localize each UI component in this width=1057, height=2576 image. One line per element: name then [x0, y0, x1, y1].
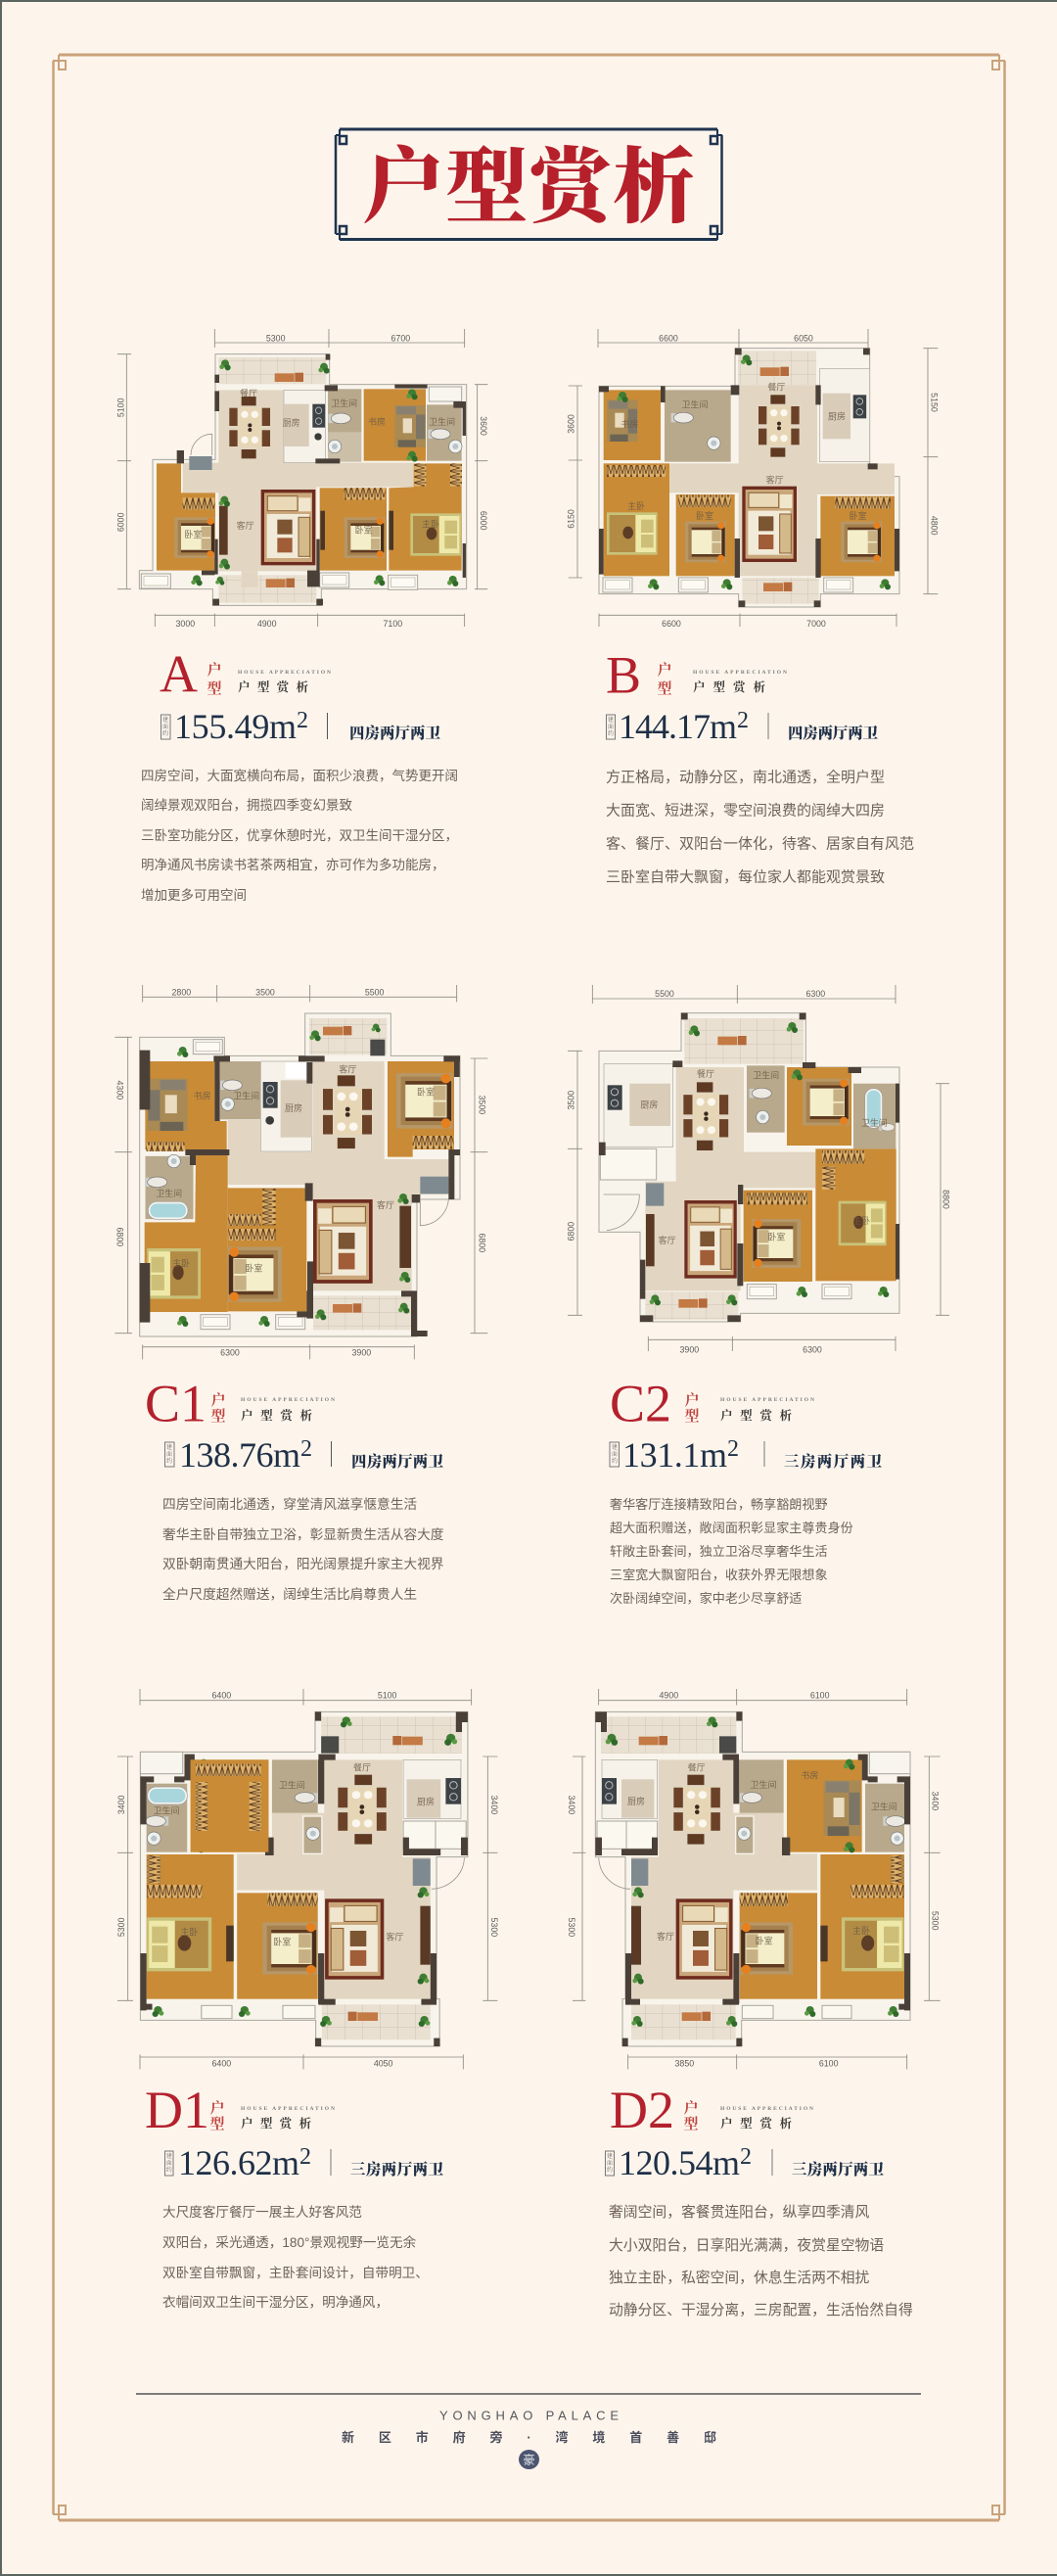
footer: [136, 2394, 921, 2469]
room labels D2: 客厅: [657, 1931, 674, 1942]
sub heading: 户型赏析: [720, 1406, 792, 1424]
dimensions A: 7100: [384, 619, 402, 629]
title box: [336, 129, 722, 240]
dimensions D1: 3400: [489, 1796, 499, 1814]
area badge: [605, 2151, 615, 2176]
area: 2: [300, 1436, 312, 1462]
dimensions C2: 6300: [806, 989, 825, 999]
room count: 四房两厅两卫: [351, 1450, 443, 1472]
room labels D1: [154, 1761, 435, 1947]
room labels D1: 主卧: [180, 1927, 198, 1938]
description D2: 大小双阳台，日享阳光满满，夜赏星空物语: [609, 2237, 884, 2254]
dimensions D1: 5100: [378, 1691, 397, 1701]
description C1: 奢华主卧自带独立卫浴，彰显新贵生活从容大度: [162, 1526, 444, 1542]
vertical label: 户: [210, 1389, 226, 1410]
divider: [330, 2149, 332, 2176]
room labels C1: 卫生间: [156, 1188, 182, 1198]
vertical label: [683, 2097, 699, 2133]
dimensions B: 4800: [930, 516, 940, 536]
room labels C1: [156, 1063, 435, 1273]
type letter: D2: [610, 2081, 674, 2139]
dimensions C1: 5500: [365, 987, 385, 997]
kitchen D2: [597, 1759, 658, 1849]
room labels D1: 卧室: [273, 1937, 291, 1947]
room labels B: 客厅: [766, 474, 784, 485]
room labels D2: [627, 1761, 897, 1946]
outer walls C2: [599, 1013, 899, 1322]
description C2: 超大面积赠送，敞阔面积彰显家主尊贵身份: [610, 1520, 853, 1535]
master bathroom tub D1: [148, 1787, 187, 1804]
header C1: [145, 1375, 443, 1475]
room labels C2: 卧室: [767, 1232, 785, 1242]
living and dining A: [183, 390, 414, 587]
room labels B: 主卧: [627, 500, 645, 511]
bedrooms A: [157, 463, 462, 571]
dimensions A: 6000: [115, 512, 125, 532]
vertical label: 型: [683, 2113, 699, 2133]
description D1: [162, 2204, 429, 2310]
description C2: 奢华客厅连接精致阳台，畅享豁朗视野: [610, 1496, 828, 1512]
room labels A: 卫生间: [331, 398, 357, 408]
bedrooms B: [604, 463, 895, 576]
vertical label: [209, 2097, 225, 2133]
floor plan C2: [567, 985, 950, 1354]
sub heading: [238, 670, 331, 695]
area: 144.17m: [619, 707, 737, 746]
vertical label: 户: [684, 1389, 700, 1410]
chinese tagline: 新区市府旁·湾境首善邸: [342, 2430, 716, 2445]
dimensions A: 3600: [479, 416, 488, 436]
description D1: 双阳台，采光通透，180°景观视野一览无余: [162, 2234, 417, 2250]
sub heading: 户型赏析: [241, 1406, 312, 1424]
study C1: [145, 1061, 227, 1151]
bathrooms A: [328, 389, 462, 462]
kitchen A: [284, 390, 326, 463]
dimensions D2: 4900: [660, 1691, 678, 1701]
room labels A: 卧室: [355, 524, 373, 535]
dimensions B: 6150: [567, 509, 576, 529]
description D1: 衣帽间双卫生间干湿分区，明净通风，: [162, 2295, 389, 2310]
dimensions C2: 3500: [567, 1091, 576, 1109]
floor plan D2: [567, 1689, 941, 2069]
room labels D1: 卫生间: [279, 1780, 305, 1791]
area: 2: [299, 2144, 311, 2170]
dimensions B: 6600: [659, 334, 678, 344]
dimensions C2: 3900: [680, 1344, 699, 1354]
room labels A: 厨房: [283, 417, 300, 428]
area badge: 面: [162, 722, 168, 730]
area: 120.54m: [619, 2143, 740, 2182]
dimensions C2: [567, 985, 950, 1354]
header D2: [605, 2081, 884, 2182]
dimensions C1: 6800: [115, 1228, 125, 1246]
header A: [160, 644, 440, 746]
dimensions D1: 6400: [212, 2059, 231, 2069]
vertical label: [684, 1389, 700, 1426]
room labels B: 厨房: [828, 410, 846, 421]
description D1: 大尺度客厅餐厅一展主人好客风范: [162, 2204, 362, 2220]
room labels A: 卧室: [184, 529, 202, 539]
dimensions C1: 3500: [255, 987, 275, 997]
structural columns B: [599, 349, 899, 607]
rooms D1 (mirrored layout of D2): [140, 1711, 468, 2046]
room count: 四房两厅两卫: [349, 722, 440, 743]
sub heading: [720, 1397, 814, 1424]
kitchen C1: [261, 1061, 311, 1151]
vertical label: [207, 659, 222, 698]
dimensions D1: 5300: [489, 1918, 499, 1937]
divider: [327, 713, 329, 739]
floor plan A: [115, 329, 488, 629]
area: 138.76m: [179, 1435, 300, 1475]
dimensions C1: 4300: [115, 1081, 125, 1100]
dimensions D1: 4050: [374, 2059, 393, 2069]
outer walls A: [139, 354, 467, 605]
description B: 客、餐厅、双阳台一体化，待客、居家自有风范: [606, 836, 914, 852]
floor plan C1: [115, 985, 487, 1359]
dimensions D2: 6100: [819, 2059, 839, 2069]
room labels B: [620, 381, 867, 521]
dimensions C1: 3900: [352, 1348, 371, 1358]
room count: 四房两厅两卫: [788, 722, 878, 743]
floor plan B: [567, 329, 940, 629]
dimensions D2: 3400: [931, 1792, 941, 1810]
vertical label: 户: [209, 2097, 225, 2118]
description B: 大面宽、短进深，零空间浪费的阔绰大四房: [606, 803, 885, 819]
logo: [519, 2450, 539, 2469]
divider: [763, 1441, 765, 1467]
sub heading: [693, 670, 787, 695]
description C1: 全户尺度超然赠送，阔绰生活比肩尊贵人生: [162, 1586, 417, 1602]
sub heading: [241, 1397, 335, 1424]
header D1: [145, 2081, 443, 2182]
area: 2: [740, 2144, 752, 2170]
room labels C1: 客厅: [377, 1199, 394, 1210]
room labels D2: 书房: [801, 1770, 818, 1781]
dimensions D2: 3850: [675, 2059, 694, 2069]
area badge: 约: [166, 1456, 172, 1465]
walk-in closet D1: [191, 1759, 268, 1852]
divider: [771, 2149, 773, 2176]
area badge: [610, 1442, 619, 1467]
area: 126.62m: [178, 2143, 299, 2182]
study and bath B: [604, 390, 731, 462]
dimensions A: 3000: [176, 619, 195, 629]
description C1: [162, 1496, 444, 1602]
dimensions D2: 6100: [810, 1691, 830, 1701]
dimensions C1: [115, 985, 487, 1359]
dimensions B: 3600: [567, 414, 576, 434]
area: 2: [737, 708, 749, 733]
description A: 四房空间，大面宽横向布局，面积少浪费，气势更开阔: [141, 768, 458, 783]
area badge: [607, 715, 615, 739]
description C2: 三室宽大飘窗阳台，收获外界无限想象: [610, 1567, 828, 1582]
sub heading: HOUSE APPRECIATION: [238, 670, 331, 676]
sub heading: HOUSE APPRECIATION: [720, 1397, 814, 1403]
room labels B: 卫生间: [682, 399, 708, 410]
outer walls D2: [595, 1711, 910, 2046]
vertical label: 型: [210, 1405, 226, 1426]
area badge: 建: [612, 1442, 618, 1451]
dimensions A: 4900: [257, 619, 277, 629]
sub heading: 户型赏析: [693, 678, 765, 695]
area badge: 约: [166, 2165, 172, 2174]
living and dining C2: [604, 1067, 815, 1290]
room labels C1: 厨房: [285, 1102, 302, 1113]
footer rule: [136, 2393, 921, 2395]
bathrooms C1: [145, 1061, 260, 1220]
dimensions D1: [116, 1689, 499, 2069]
dimensions D2: 5300: [567, 1918, 576, 1937]
room labels D1: 餐厅: [353, 1761, 371, 1772]
room labels A: 卫生间: [429, 416, 455, 427]
study D2: [787, 1759, 862, 1852]
floor plan D1: [116, 1689, 499, 2069]
kitchen B: [819, 369, 870, 462]
vertical label: 户: [657, 659, 672, 679]
area badge: 面: [612, 1449, 618, 1458]
dimensions C1: 6300: [220, 1348, 240, 1358]
room labels D2: 卫生间: [751, 1779, 776, 1790]
sub heading: HOUSE APPRECIATION: [241, 1397, 335, 1403]
dimensions C2: 8800: [941, 1190, 950, 1209]
room count: 三房两厅两卫: [350, 2158, 443, 2179]
area badge: 建: [166, 1442, 172, 1451]
dimensions B: [567, 329, 940, 629]
area badge: 建: [608, 715, 614, 724]
description C1: 四房空间南北通透，穿堂清风滋享惬意生活: [162, 1496, 417, 1512]
dimensions B: 5150: [930, 393, 940, 412]
room labels B: 卧室: [850, 510, 867, 521]
room labels D2: 卧室: [756, 1936, 773, 1946]
bathrooms D2: [736, 1759, 905, 1853]
description B: 三卧室自带大飘窗，每位家人都能观赏景致: [606, 867, 885, 885]
room labels C1: 主卧: [172, 1257, 190, 1268]
description C2: 次卧阔绰空间，家中老少尽享舒适: [610, 1590, 802, 1606]
room labels A: 客厅: [237, 520, 254, 531]
sub heading: 户型赏析: [241, 2114, 311, 2131]
bedrooms C2: [744, 1148, 896, 1282]
divider: [331, 1441, 333, 1467]
room labels C2: 厨房: [640, 1100, 658, 1110]
room labels A: 书房: [368, 416, 386, 427]
dimensions C2: 5500: [655, 989, 674, 999]
area badge: [161, 715, 170, 739]
area badge: 建: [607, 2151, 613, 2160]
room labels C2: 卫生间: [753, 1070, 779, 1081]
sub heading: 户型赏析: [720, 2114, 792, 2131]
dimensions A: 6700: [391, 334, 410, 344]
dimensions C1: 2800: [172, 987, 191, 997]
room labels B: 餐厅: [767, 381, 785, 392]
area badge: 约: [608, 728, 614, 737]
area badge: 约: [162, 728, 168, 737]
area badge: 约: [607, 2165, 613, 2174]
dimensions D2: 3400: [567, 1796, 576, 1814]
area: 2: [297, 708, 308, 733]
balconies A: [141, 357, 462, 603]
room labels C2: 客厅: [659, 1235, 676, 1245]
type letter: C1: [145, 1375, 207, 1433]
bedrooms C1: [145, 1061, 454, 1312]
area badge: 面: [607, 2158, 613, 2167]
area badge: [164, 2151, 173, 2176]
logo: 豪: [523, 2452, 535, 2467]
header B: [606, 646, 878, 746]
rooms D2: [595, 1711, 910, 2046]
divider: [767, 713, 769, 739]
dimensions C1: 6800: [477, 1234, 486, 1252]
outer walls B: [599, 349, 899, 607]
area badge: 建: [166, 2151, 172, 2160]
area badge: 面: [166, 1449, 172, 1458]
type letter: B: [606, 646, 641, 705]
description A: 阔绰景观双阳台，拥揽四季变幻景致: [141, 797, 352, 813]
description C2: [610, 1496, 853, 1606]
room labels C2: 卫生间: [861, 1117, 888, 1128]
dimensions D2: [567, 1689, 941, 2069]
dimensions B: 7000: [806, 619, 826, 629]
vertical label: [210, 1389, 226, 1426]
dimensions A: 5300: [266, 334, 286, 344]
description D2: 动静分区、干湿分离，三房配置，生活怡然自得: [609, 2302, 913, 2318]
outer walls C1: [140, 1013, 460, 1336]
room labels C2: [640, 1068, 888, 1245]
sub heading: [720, 2106, 813, 2131]
vertical label: 户: [683, 2097, 699, 2118]
living and dining B: [669, 385, 895, 576]
vertical label: 户: [207, 659, 222, 679]
balconies B: [603, 351, 891, 604]
dimensions C1: 3500: [477, 1096, 486, 1114]
structural columns D2: [595, 1711, 910, 2046]
room labels D2: 厨房: [627, 1796, 645, 1806]
vertical label: 型: [684, 1405, 700, 1426]
room labels B: 书房: [620, 419, 638, 430]
description A: 三卧室功能分区，优享休憩时光，双卫生间干湿分区，: [141, 827, 458, 843]
dimensions D1: 3400: [116, 1795, 126, 1814]
description D2: 独立主卧，私密空间，休息生活两不相扰: [609, 2270, 870, 2286]
study A: [364, 389, 426, 462]
dimensions C2: 6300: [803, 1344, 822, 1354]
area badge: [164, 1442, 174, 1467]
area badge: 约: [612, 1456, 618, 1465]
type letter: A: [160, 644, 198, 703]
description D1: 双卧室自带飘窗，主卧套间设计，自带明卫、: [162, 2265, 429, 2280]
dimensions D1: 6400: [212, 1691, 231, 1701]
room count: 三房两厅两卫: [784, 1450, 882, 1472]
room labels D1: 客厅: [386, 1932, 403, 1943]
room labels D1: 厨房: [417, 1796, 435, 1806]
dimensions B: 6050: [794, 334, 813, 344]
dimensions A: [115, 329, 488, 629]
vertical label: [657, 659, 672, 698]
vertical label: 型: [209, 2113, 225, 2133]
description B: 方正格局，动静分区，南北通透，全明户型: [606, 768, 885, 785]
sub heading: 户型赏析: [238, 678, 308, 695]
room labels A: [184, 388, 455, 539]
room labels C1: 卫生间: [233, 1091, 259, 1101]
sub heading: HOUSE APPRECIATION: [241, 2106, 335, 2112]
balconies C1: [177, 1018, 411, 1330]
english name: YONGHAO PALACE: [439, 2409, 619, 2422]
header C2: [610, 1375, 882, 1475]
area badge: 面: [608, 722, 614, 730]
area badge: 面: [166, 2158, 172, 2167]
sub heading: HOUSE APPRECIATION: [720, 2106, 813, 2112]
description A: 增加更多可用空间: [141, 887, 247, 903]
title: [336, 121, 722, 240]
type letter: D1: [145, 2081, 209, 2139]
room labels C1: 卧室: [417, 1087, 435, 1098]
structural columns C1: [140, 1051, 460, 1336]
room labels A: 主卧: [422, 518, 439, 529]
dimensions D2: 5300: [931, 1911, 941, 1931]
structural columns A: [177, 354, 466, 605]
kitchen C2: [600, 1064, 672, 1180]
structural columns C2: [599, 1013, 899, 1322]
room labels D2: 主卧: [852, 1925, 870, 1936]
type letter: C2: [610, 1375, 671, 1433]
room labels C1: 书房: [194, 1091, 211, 1101]
living and dining C1: [228, 1061, 448, 1290]
area badge: 建: [162, 715, 168, 724]
dimensions A: 6000: [479, 511, 488, 531]
area: 2: [727, 1436, 739, 1462]
living and dining D2: [599, 1759, 817, 1999]
sub heading: HOUSE APPRECIATION: [693, 670, 787, 676]
description D2: 奢阔空间，客餐贯连阳台，纵享四季清风: [609, 2204, 870, 2221]
room labels C1: 客厅: [339, 1063, 356, 1074]
dimensions C2: 6800: [567, 1222, 576, 1241]
description C2: 轩敞主卧套间，独立卫浴尽享奢华生活: [610, 1543, 828, 1559]
balconies D2: [601, 1716, 910, 2039]
room labels A: 餐厅: [240, 388, 257, 398]
description A: [141, 768, 458, 903]
dimensions A: 5100: [115, 398, 125, 417]
room labels C2: 餐厅: [697, 1068, 714, 1079]
description C1: 双卧朝南贯通大阳台，阳光阔景提升家主大视界: [162, 1556, 444, 1571]
bathrooms C2: [747, 1065, 896, 1148]
description A: 明净通风书房读书茗茶两相宜，亦可作为多功能房，: [141, 857, 444, 872]
study C2: [787, 1067, 851, 1146]
balconies C2: [645, 1018, 889, 1320]
vertical label: 型: [657, 678, 672, 698]
area: 155.49m: [174, 707, 297, 746]
room labels C1: 卧室: [245, 1262, 262, 1273]
vertical label: 型: [207, 678, 222, 698]
area: 131.1m: [622, 1435, 727, 1475]
dimensions D1: 5300: [116, 1917, 126, 1937]
description D2: [609, 2204, 913, 2318]
description B: [606, 768, 914, 885]
sub heading: [241, 2106, 335, 2131]
room labels D2: 餐厅: [688, 1761, 706, 1772]
room labels C2: 主卧: [852, 1215, 870, 1226]
room labels B: 卧室: [696, 510, 713, 521]
title text: 户型赏析: [362, 121, 695, 240]
room count: 三房两厅两卫: [792, 2158, 884, 2179]
room labels D2: 卫生间: [871, 1802, 897, 1812]
room labels D1: 卫生间: [154, 1805, 179, 1816]
bedrooms D2: [740, 1854, 904, 1999]
dimensions B: 6600: [662, 619, 681, 629]
